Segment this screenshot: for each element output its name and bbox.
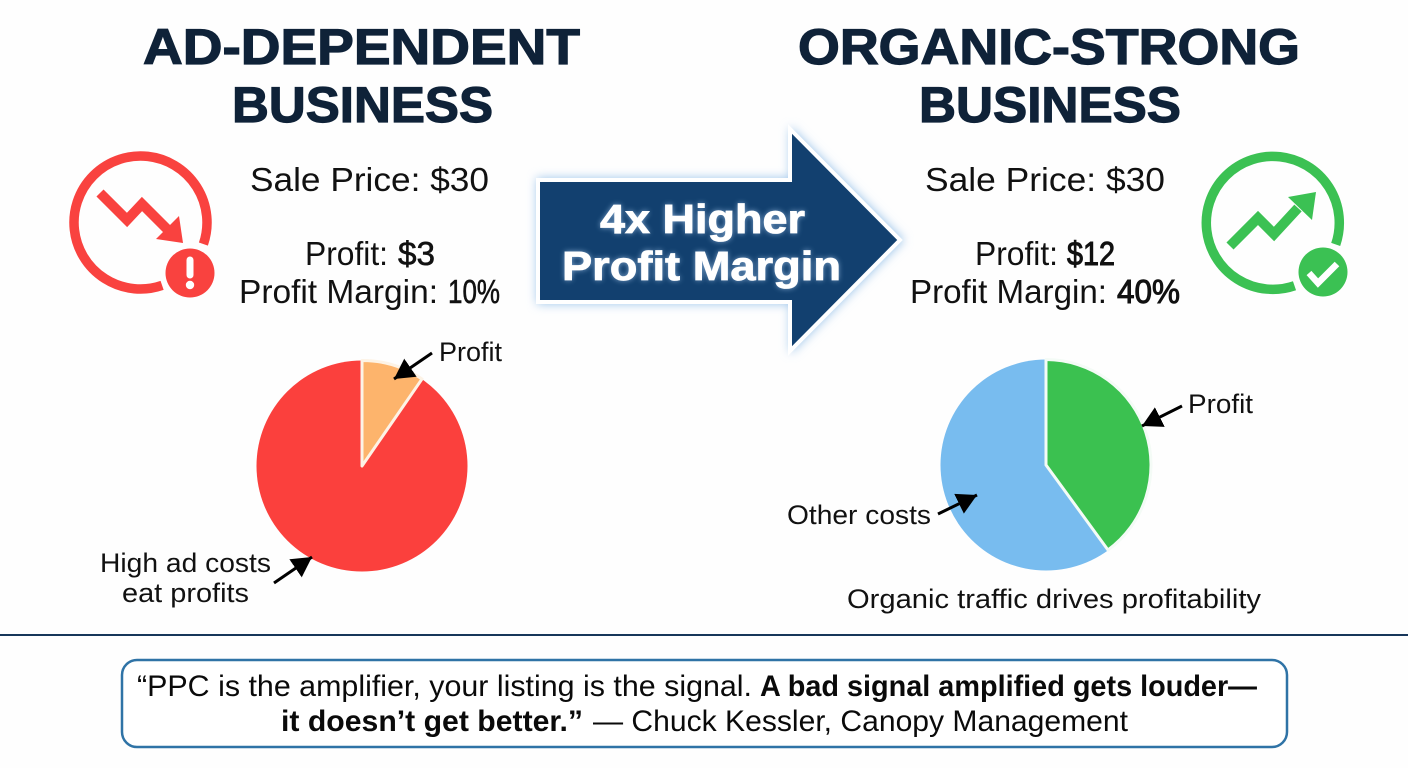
center arrow: 4x higher profit margin: 4x Higher <box>600 196 805 242</box>
label: high ad costs <box>100 548 312 608</box>
label: other costs: Other costs <box>787 500 931 530</box>
label: other costs <box>787 495 977 530</box>
right heading: BUSINESS <box>919 77 1181 133</box>
label: high ad costs: eat profits <box>122 578 249 608</box>
right stats text: Profit Margin: <box>910 273 1107 310</box>
label: profit (left pie) <box>394 337 502 379</box>
right stats text <box>910 161 1180 310</box>
label: profit (right pie) <box>1142 389 1254 426</box>
label: high ad costs: High ad costs <box>100 548 271 578</box>
pie chart: organic-strong <box>940 360 1152 570</box>
caption: organic traffic: Organic traffic drives profitability <box>847 584 1262 614</box>
left stats text <box>239 161 500 310</box>
icon: rising chart with check <box>1206 156 1348 296</box>
right stats text: 40% <box>1117 273 1180 310</box>
label: profit (left pie): Profit <box>439 337 502 367</box>
left heading: AD-DEPENDENT <box>143 19 580 75</box>
quote text: — Chuck Kessler, Canopy Management <box>593 705 1129 738</box>
left stats text: Profit Margin: <box>239 273 438 310</box>
center arrow: 4x higher profit margin <box>537 126 904 354</box>
left stats text: Profit: <box>305 235 388 272</box>
quote text: it doesn’t get better.” <box>281 705 583 738</box>
left heading: BUSINESS <box>232 77 493 133</box>
quote text: “PPC is the amplifier, your listing is the signal. <box>137 670 752 703</box>
right heading <box>798 19 1300 133</box>
right stats text: $12 <box>1067 235 1115 272</box>
icon: declining chart with warning <box>74 156 214 298</box>
pie chart: ad-dependent <box>256 360 468 572</box>
center arrow: 4x higher profit margin: Profit Margin <box>562 243 841 289</box>
left heading <box>143 19 580 133</box>
center arrow: 4x higher profit margin: 4x Higher <box>600 196 805 242</box>
left stats text: Sale Price: $30 <box>250 161 489 198</box>
quote text <box>137 670 1257 738</box>
center arrow: 4x higher profit margin: Profit Margin <box>562 243 841 289</box>
label: profit (right pie): Profit <box>1188 389 1254 419</box>
right stats text: Profit: <box>975 235 1058 272</box>
quote box <box>122 660 1287 747</box>
left stats text: 10% <box>448 273 500 310</box>
left stats text: $3 <box>398 235 435 272</box>
right heading: ORGANIC-STRONG <box>798 19 1300 75</box>
quote text: A bad signal amplified gets louder— <box>760 670 1257 703</box>
right stats text: Sale Price: $30 <box>925 161 1165 198</box>
